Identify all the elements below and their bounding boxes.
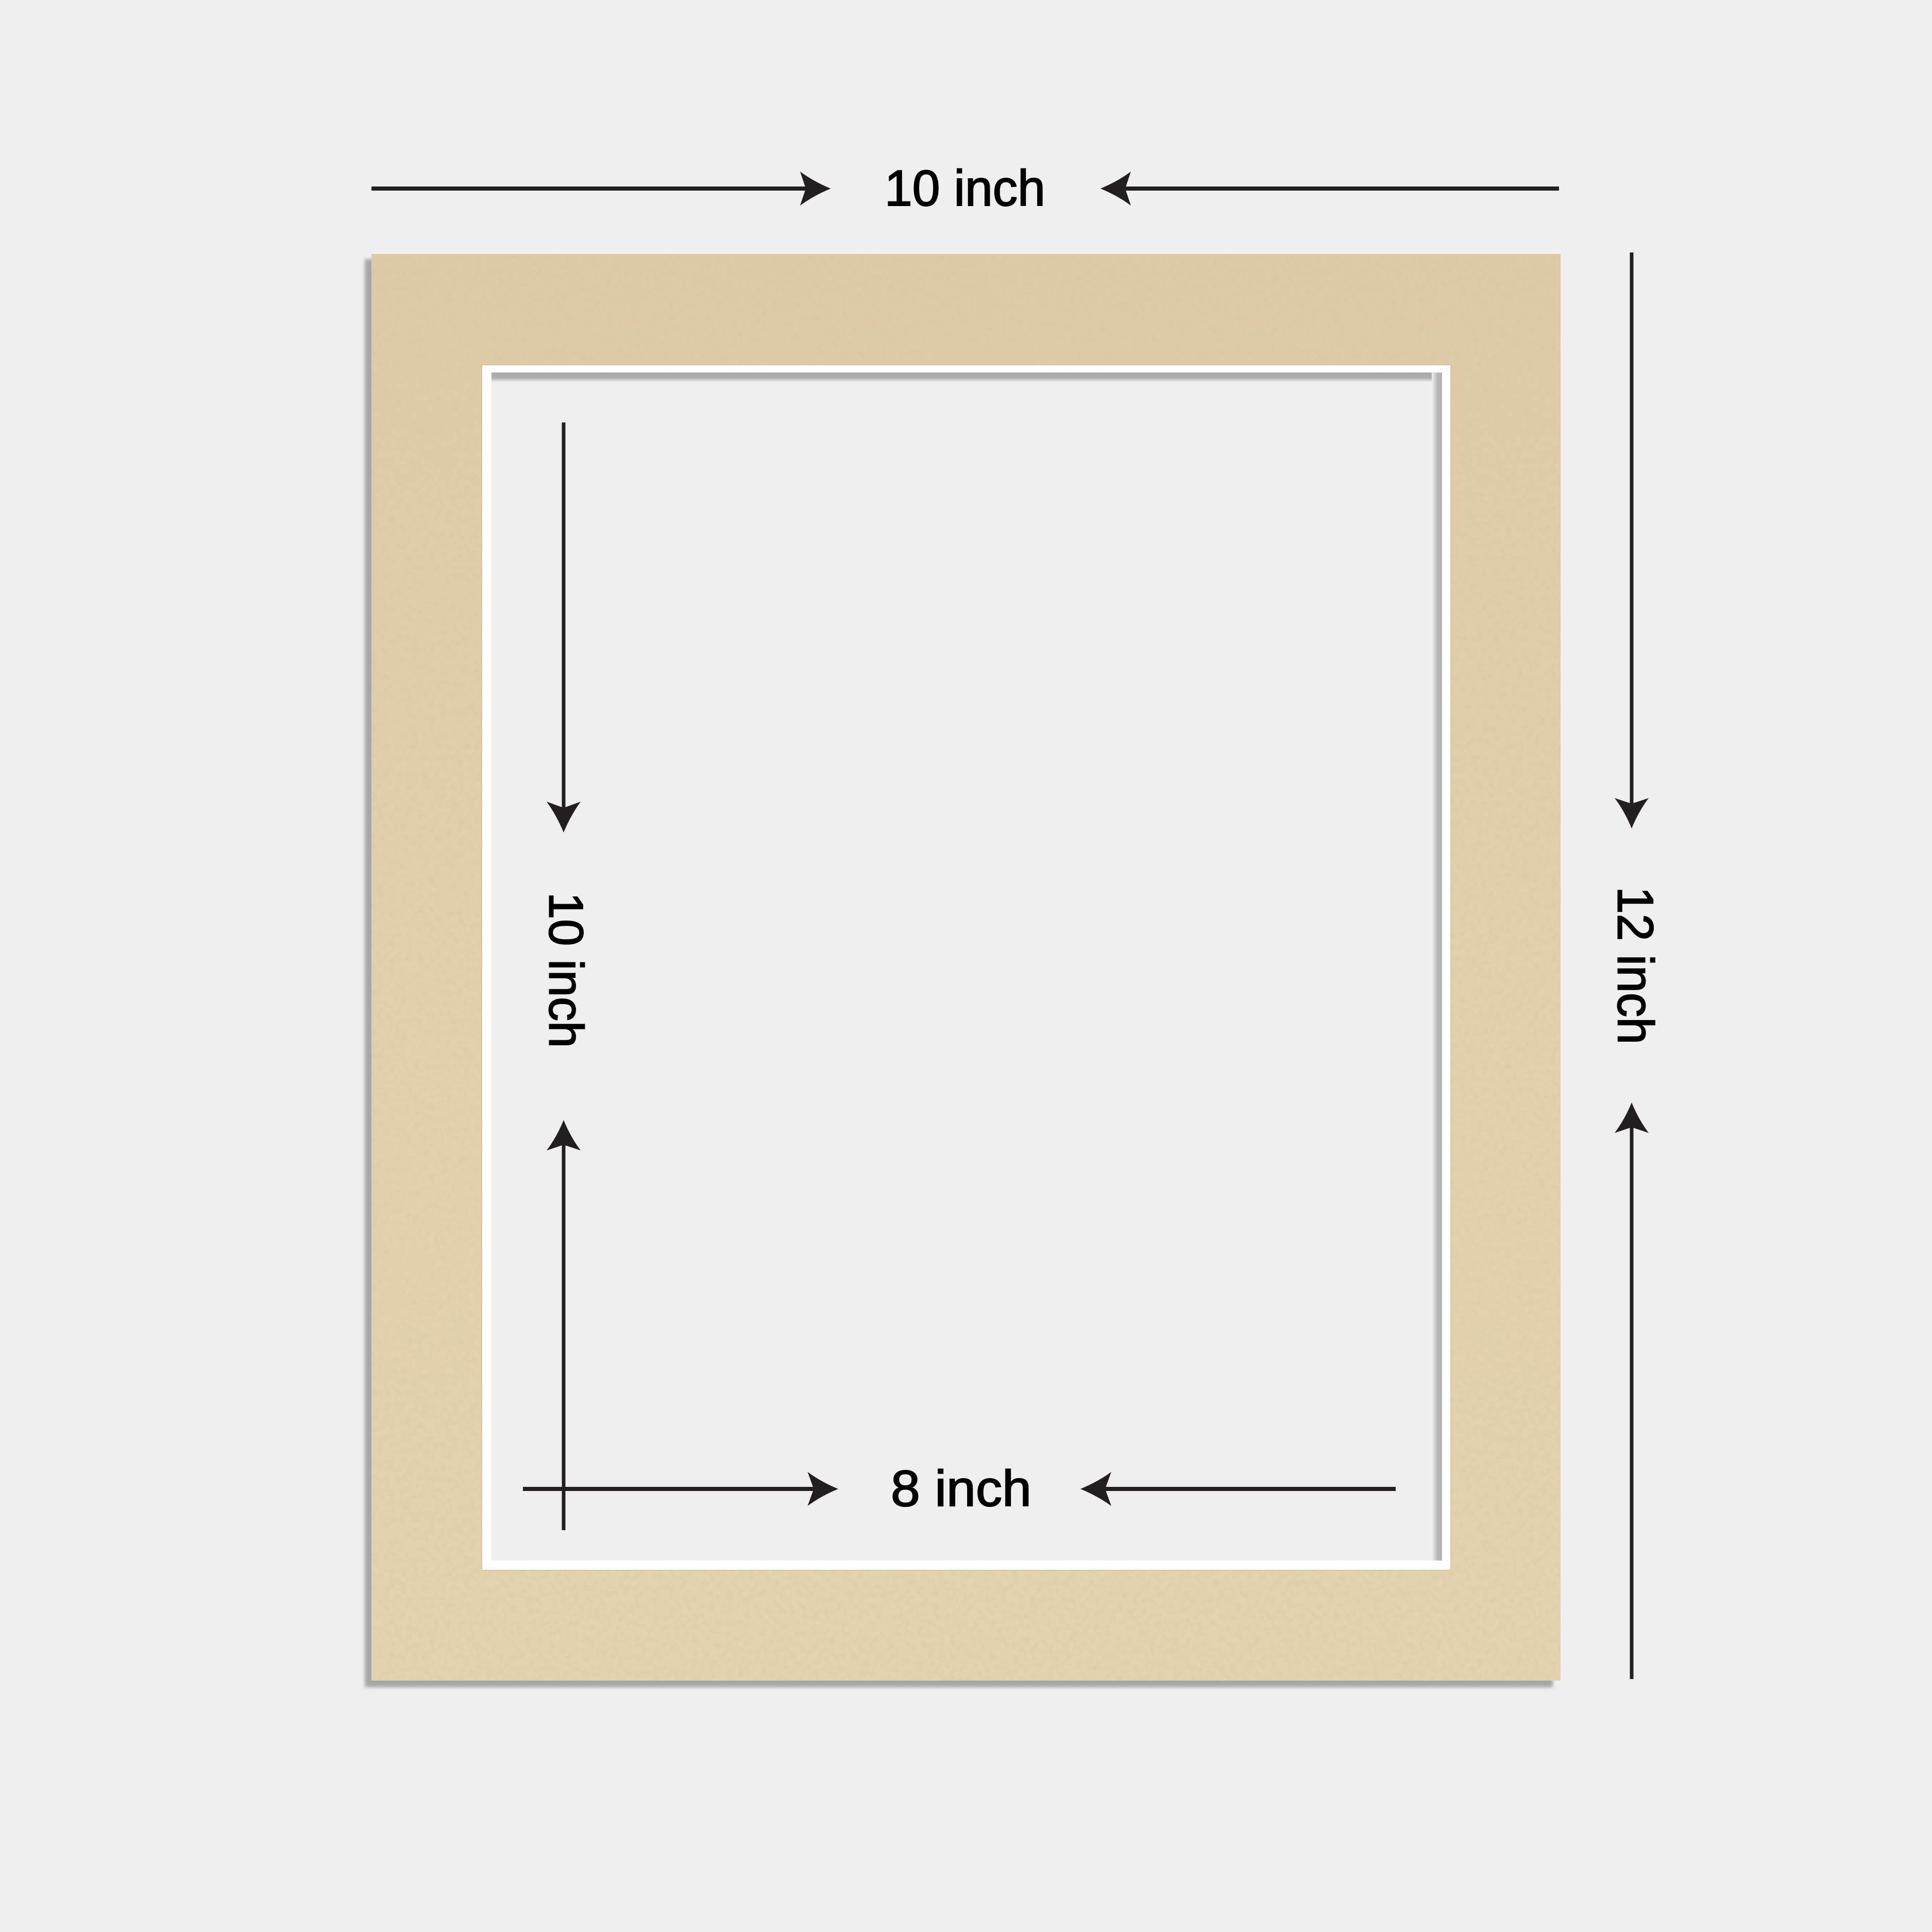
arrow: inner width right: [1080, 1472, 1396, 1506]
mat drop shadow: [365, 259, 1553, 1687]
label: 12 inch height: 12 inch: [1607, 887, 1664, 1044]
label: 10 inch width: 10 inch: [885, 160, 1045, 216]
window opening: [492, 372, 1442, 1561]
mat paper texture: [371, 254, 1561, 1681]
mat surface: [371, 254, 1561, 1681]
arrow: top width right: [1100, 172, 1559, 206]
arrow: right height down: [1615, 252, 1649, 828]
arrow: inner height down: [547, 422, 581, 833]
label: 10 inch inner height: 10 inch: [539, 892, 594, 1048]
arrow: inner width left: [523, 1472, 838, 1506]
panel: mat board: [365, 254, 1561, 1687]
arrow: right height up: [1615, 1103, 1649, 1679]
arrow: top width left: [371, 172, 831, 206]
white bevel: [482, 365, 1451, 1570]
label: 8 inch inner width: 8 inch: [891, 1460, 1031, 1517]
arrow: inner height up: [547, 1120, 581, 1530]
